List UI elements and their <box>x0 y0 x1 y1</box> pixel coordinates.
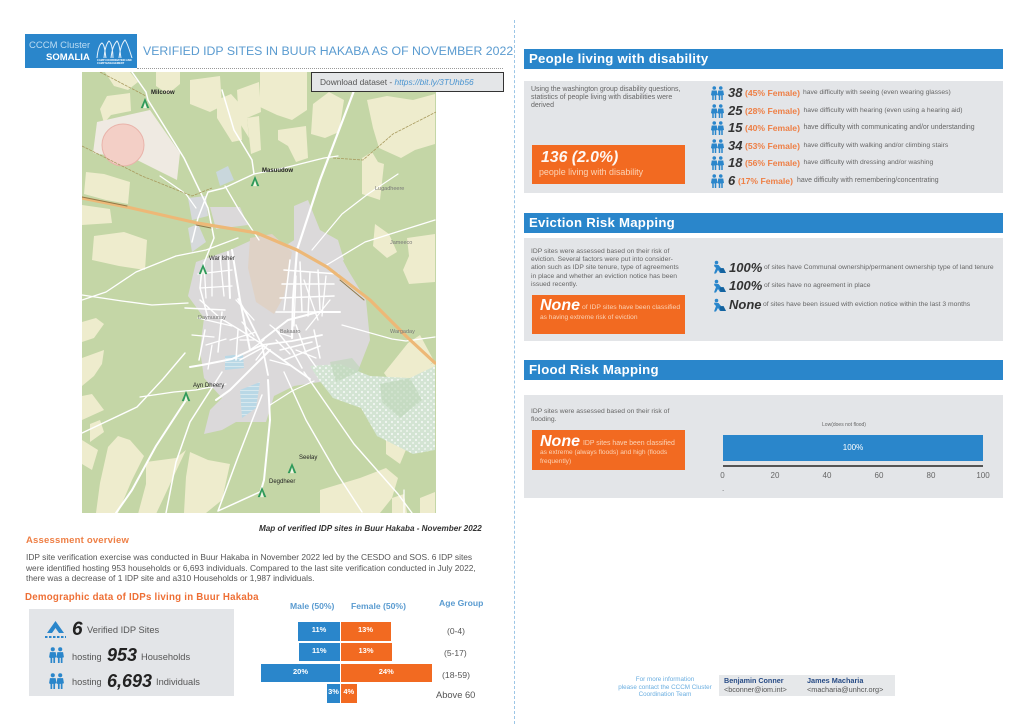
wetland <box>310 364 435 454</box>
logo: CCCM Cluster Somalia: SOMALIA <box>46 52 90 63</box>
chart label: Low(does not flood) <box>822 422 866 428</box>
row 0-4: (0-4) <box>447 626 465 636</box>
row: dressing: have difficulty with dressing and/or washing <box>804 159 933 166</box>
stat: individuals: Individuals <box>156 677 200 687</box>
title: VERIFIED IDP SITES IN BUUR HAKABA AS OF NOVEMBER 2022 <box>143 44 513 58</box>
farmland patches <box>82 72 435 514</box>
bar chart: flood risk: . <box>722 484 724 493</box>
place labels: Ayn Dheery <box>193 383 224 389</box>
row 18-59: 24% <box>379 667 394 676</box>
row 5-17: 11% <box>312 646 327 655</box>
heading: demographic data: Demographic data of IDPs living in Buur Hakaba <box>25 592 259 603</box>
logo: CCCM Cluster Somalia: CAMP COORDINATION AND CAMP MANAGEMENT <box>97 59 132 65</box>
contact: Benjamin Conner <box>724 676 787 694</box>
logo: CCCM Cluster Somalia <box>25 34 137 68</box>
cleared pink zone <box>93 110 180 180</box>
row: dressing: 18 <box>728 155 742 170</box>
map base <box>82 72 436 513</box>
row: remembering: have difficulty with remembering/concentrating <box>797 177 939 184</box>
contact: James Macharia <box>807 676 883 694</box>
row: remembering: 6 <box>728 173 735 188</box>
urban area <box>188 230 370 434</box>
row: communicating <box>711 120 975 135</box>
row: seeing <box>711 85 951 100</box>
eviction intro text: IDP sites were assessed based on their risk of <box>531 248 669 255</box>
stat: households <box>72 645 190 665</box>
place labels: Seelay <box>299 455 317 461</box>
row: eviction notice: of sites have been issued with eviction notice within the last 3 months <box>763 301 970 308</box>
heading: people living with disability <box>524 49 1003 69</box>
stat: households: 953 <box>107 645 137 665</box>
assessment text: there was a decrease of 1 IDP site and a310 Households or 1,987 individuals. <box>26 573 314 583</box>
assessment text: were identified hosting 953 households or 6,693 individuals. Compared to the last site verification conducted in July 2022, <box>26 562 476 572</box>
stat: individuals: hosting <box>72 677 102 687</box>
bar chart: flood risk: 0 <box>720 470 725 480</box>
heading: assessment overview: Assessment overview <box>26 535 129 546</box>
row: hearing: have difficulty with hearing (even using a hearing aid) <box>804 107 962 114</box>
bare ground <box>248 234 292 314</box>
stat: households: Households <box>141 652 190 662</box>
row 18-59: (18-59) <box>442 670 470 680</box>
disability intro text: derived <box>531 102 554 109</box>
tracks <box>82 72 436 196</box>
bar chart: flood risk: 40 <box>823 470 831 480</box>
row: seeing: have difficulty with seeing (even wearing glasses) <box>803 89 951 96</box>
row: dressing <box>711 155 933 170</box>
flood intro text <box>531 408 670 423</box>
callout: none flood: frequently) <box>540 458 571 465</box>
place labels: Degdheer <box>269 479 295 485</box>
bar: 100%: 100% <box>843 443 863 452</box>
callout: none flood: None <box>540 432 580 450</box>
row 5-17: (5-17) <box>444 648 467 658</box>
bar chart: flood risk: 80 <box>927 470 935 480</box>
heading: people living with disability: People living with disability <box>529 51 708 66</box>
contact panel <box>719 675 895 696</box>
stat: households: hosting <box>72 652 102 662</box>
place labels: Masuudow <box>262 168 293 174</box>
age group header: Age Group <box>439 598 483 608</box>
contact note: For more information <box>636 676 694 683</box>
map of verified IDP sites: Wargaday <box>390 329 415 335</box>
panel: key figures <box>29 609 234 696</box>
callout: none extreme eviction: None <box>540 297 580 314</box>
heading: eviction risk mapping <box>524 213 1003 233</box>
assessment text: IDP site verification exercise was conducted in Buur Hakaba in November 2022 led by the CESDO and SOS. 6 IDP sites <box>26 552 472 562</box>
row: walking: (53% Female) <box>745 141 800 151</box>
bar chart: flood risk: 20 <box>771 470 779 480</box>
eviction intro text <box>531 248 679 288</box>
disability intro text: statistics of people living with disabilities were <box>531 94 672 101</box>
map of verified IDP sites <box>82 72 436 513</box>
row: seeing: 38 <box>728 85 742 100</box>
contact: Benjamin Conner: Benjamin Conner <box>724 676 784 685</box>
place labels: War Isher <box>209 256 235 262</box>
row 18-59 <box>261 664 470 682</box>
row: agreement: 100% <box>729 278 762 293</box>
row: walking <box>711 138 948 153</box>
place labels <box>151 90 317 485</box>
row: eviction notice <box>714 297 970 312</box>
bar: 100% <box>723 435 983 461</box>
female header: Female (50%) <box>351 600 406 610</box>
vertical divider <box>514 20 515 724</box>
row: seeing: (45% Female) <box>745 88 800 98</box>
row: dressing: (56% Female) <box>745 158 800 168</box>
stat: individuals: 6,693 <box>107 670 152 690</box>
contact: Benjamin Conner: <bconner@iom.int> <box>724 685 787 694</box>
row: hearing: (28% Female) <box>745 106 800 116</box>
row above 60: 4% <box>343 687 354 696</box>
row: walking: 34 <box>728 138 742 153</box>
callout: none extreme eviction: as having extreme risk of eviction <box>540 314 637 321</box>
eviction intro text: issued recently. <box>531 281 577 288</box>
eviction intro text: ation such as IDP site tenure, type of agreements <box>531 264 679 271</box>
male header: Male (50%) <box>290 600 334 610</box>
row above 60 <box>327 684 475 703</box>
eviction intro text: eviction. Several factors were put into consider- <box>531 256 673 263</box>
contact note <box>618 676 712 698</box>
callout: none extreme eviction: of IDP sites have been classified <box>582 304 680 310</box>
row: hearing <box>711 103 962 118</box>
row: land tenure: 100% <box>729 260 762 275</box>
bar chart: flood risk <box>720 422 990 493</box>
row 0-4: 11% <box>312 625 326 634</box>
row: remembering: (17% Female) <box>738 176 793 186</box>
row 0-4 <box>298 622 465 641</box>
contact: James Macharia: <macharia@unhcr.org> <box>807 685 883 694</box>
icon: people <box>49 647 64 663</box>
row: agreement: of sites have no agreement in place <box>764 282 871 289</box>
callout: 136 people: 136 (2.0%) <box>541 149 618 166</box>
map of verified IDP sites: Daynuunay <box>198 315 226 321</box>
row 5-17: 13% <box>358 646 374 655</box>
download dataset box: Download dataset - https://bit.ly/3TUhb56 <box>320 77 474 87</box>
flood intro text: flooding. <box>531 416 557 423</box>
row: communicating: 15 <box>728 120 742 135</box>
stat: sites: Verified IDP Sites <box>87 625 159 635</box>
heading: flood risk mapping <box>524 360 1003 380</box>
pink circle <box>102 124 144 166</box>
flood intro text: IDP sites were assessed based on their risk of <box>531 408 669 415</box>
disability intro text <box>531 86 680 109</box>
map of verified IDP sites: Lugadheere <box>375 186 404 192</box>
callout: none flood: IDP sites have been classified <box>583 440 675 446</box>
contact note: Coordination Team <box>639 691 691 698</box>
map of verified IDP sites: Jameeco <box>390 240 412 246</box>
row 18-59: 20% <box>293 667 308 676</box>
contact note: please contact the CCCM Cluster <box>618 684 712 691</box>
download dataset box <box>311 72 504 92</box>
IDP site markers <box>141 98 296 497</box>
row 0-4: 13% <box>358 625 373 634</box>
row: land tenure <box>714 260 994 275</box>
row above 60: 3% <box>328 687 339 696</box>
row: hearing: 25 <box>728 103 742 118</box>
callout: none extreme eviction <box>532 295 685 334</box>
disability intro text: Using the washington group disability questions, <box>531 86 680 92</box>
row: walking: have difficulty with walking and/or climbing stairs <box>804 142 948 149</box>
row: land tenure: of sites have Communal ownership/permanent ownership type of land tenure <box>764 264 994 271</box>
population pyramid <box>261 598 483 703</box>
callout: 136 people: people living with disability <box>539 167 643 177</box>
assessment text <box>26 552 476 583</box>
stat: individuals <box>72 670 200 690</box>
roads <box>82 72 435 513</box>
panel: eviction <box>524 238 1003 341</box>
place labels: Milcoow <box>151 90 175 96</box>
bar chart: flood risk: 60 <box>875 470 883 480</box>
icon: tent <box>45 621 66 638</box>
row: communicating: (40% Female) <box>745 123 800 133</box>
main highway <box>82 197 435 363</box>
row: eviction notice: None <box>729 297 762 312</box>
heading: flood risk mapping: Flood Risk Mapping <box>529 362 659 377</box>
panel: disability <box>524 81 1003 193</box>
header rule <box>137 68 503 69</box>
logo: CCCM Cluster Somalia: CCCM Cluster <box>29 40 90 51</box>
row: agreement <box>714 278 871 293</box>
stat: sites: 6 <box>72 619 83 640</box>
stat: sites <box>72 619 159 640</box>
row: communicating: have difficulty with communicating and/or understanding <box>804 124 975 131</box>
eviction intro text: in place and whether an eviction notice has been <box>531 273 677 280</box>
row 5-17 <box>299 643 467 661</box>
row above 60: Above 60 <box>436 690 475 700</box>
row: remembering <box>711 173 939 188</box>
bar chart: flood risk: 100 <box>976 470 990 480</box>
icon: people <box>49 673 64 689</box>
callout: 136 people <box>532 145 685 184</box>
map caption: Map of verified IDP sites in Buur Hakaba - November 2022 <box>259 524 482 533</box>
contact: James Macharia: James Macharia <box>807 676 863 685</box>
panel: flood <box>524 395 1003 498</box>
map of verified IDP sites: Bakaaro <box>280 329 300 335</box>
callout: none flood <box>532 430 685 470</box>
heading: eviction risk mapping: Eviction Risk Mapping <box>529 215 675 230</box>
water <box>225 354 260 418</box>
callout: none flood: as extreme (always floods) and high (floods <box>540 449 667 456</box>
axis <box>723 465 983 466</box>
